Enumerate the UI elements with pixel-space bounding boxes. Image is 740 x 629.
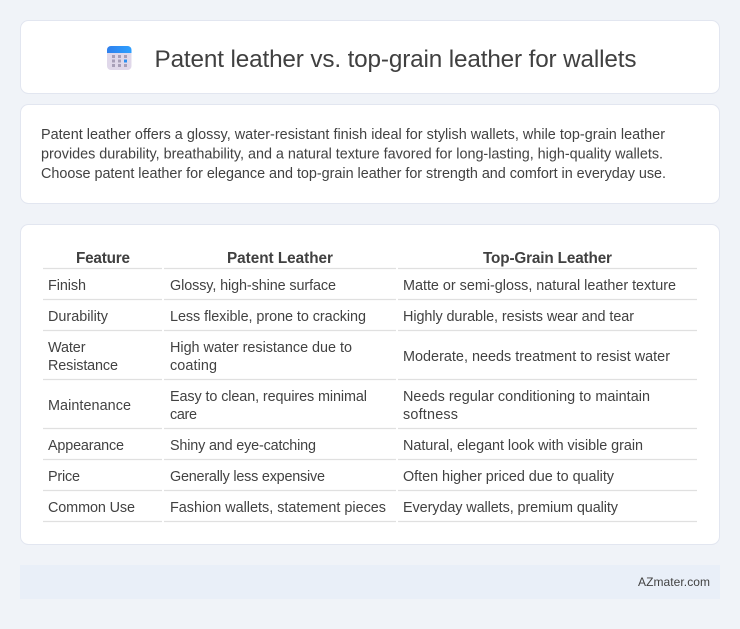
row: maintenance — [43, 389, 697, 428]
row: appearance: Shiny and eye-catching — [170, 438, 316, 454]
row: durability: Highly durable, resists wear and tear — [403, 309, 634, 325]
row: common use — [43, 500, 697, 522]
row: maintenance: Needs regular conditioning to maintain — [403, 389, 650, 405]
row: finish: Finish — [48, 278, 86, 294]
table header: Top-Grain Leather — [483, 250, 612, 267]
row: durability: Less flexible, prone to cracking — [170, 309, 366, 325]
row: maintenance: Maintenance — [48, 398, 131, 414]
row: price — [43, 469, 697, 490]
table header: Patent Leather — [227, 250, 333, 267]
row: water resistance: coating — [170, 358, 217, 374]
row: common use: Common Use — [48, 500, 135, 516]
footer credit: AZmater.com — [638, 575, 710, 589]
summary text — [41, 127, 666, 182]
table header — [43, 250, 697, 268]
summary text: Patent leather offers a glossy, water-resistant finish ideal for stylish wallets, while top-grain leather — [41, 127, 665, 143]
title: Patent leather vs. top-grain leather for wallets — [154, 46, 636, 73]
row: price: Price — [48, 469, 80, 485]
row: water resistance: Resistance — [48, 358, 118, 374]
summary text: provides durability, breathability, and a natural texture favored for long-lasting, high-quality wallets. — [41, 146, 663, 162]
row: common use: Everyday wallets, premium quality — [403, 500, 619, 516]
row: price: Often higher priced due to quality — [403, 469, 615, 485]
comparison table panel — [20, 224, 720, 544]
table header: Feature — [76, 250, 130, 267]
summary panel — [20, 104, 720, 204]
row: water resistance: Moderate, needs treatment to resist water — [403, 349, 670, 365]
row: finish — [43, 278, 697, 300]
row: finish: Matte or semi-gloss, natural leather texture — [403, 278, 676, 294]
icon: calendar — [107, 46, 132, 70]
row: price: Generally less expensive — [170, 469, 325, 485]
row: appearance — [43, 438, 697, 460]
row: durability — [43, 309, 697, 330]
row: maintenance: care — [170, 407, 197, 423]
row: appearance: Natural, elegant look with visible grain — [403, 438, 643, 454]
row: water resistance: Water — [48, 340, 86, 356]
row: appearance: Appearance — [48, 438, 124, 454]
row: water resistance: High water resistance due to — [170, 340, 352, 356]
row: maintenance: Easy to clean, requires minimal — [170, 389, 367, 405]
row: maintenance: softness — [403, 407, 458, 423]
footer band — [20, 565, 720, 599]
row: durability: Durability — [48, 309, 109, 325]
row: finish: Glossy, high-shine surface — [170, 278, 336, 294]
row: common use: Fashion wallets, statement pieces — [170, 500, 386, 516]
summary text: Choose patent leather for elegance and top-grain leather for strength and comfort in everyday use. — [41, 166, 666, 182]
header panel — [20, 20, 720, 94]
row: water resistance — [43, 340, 697, 380]
